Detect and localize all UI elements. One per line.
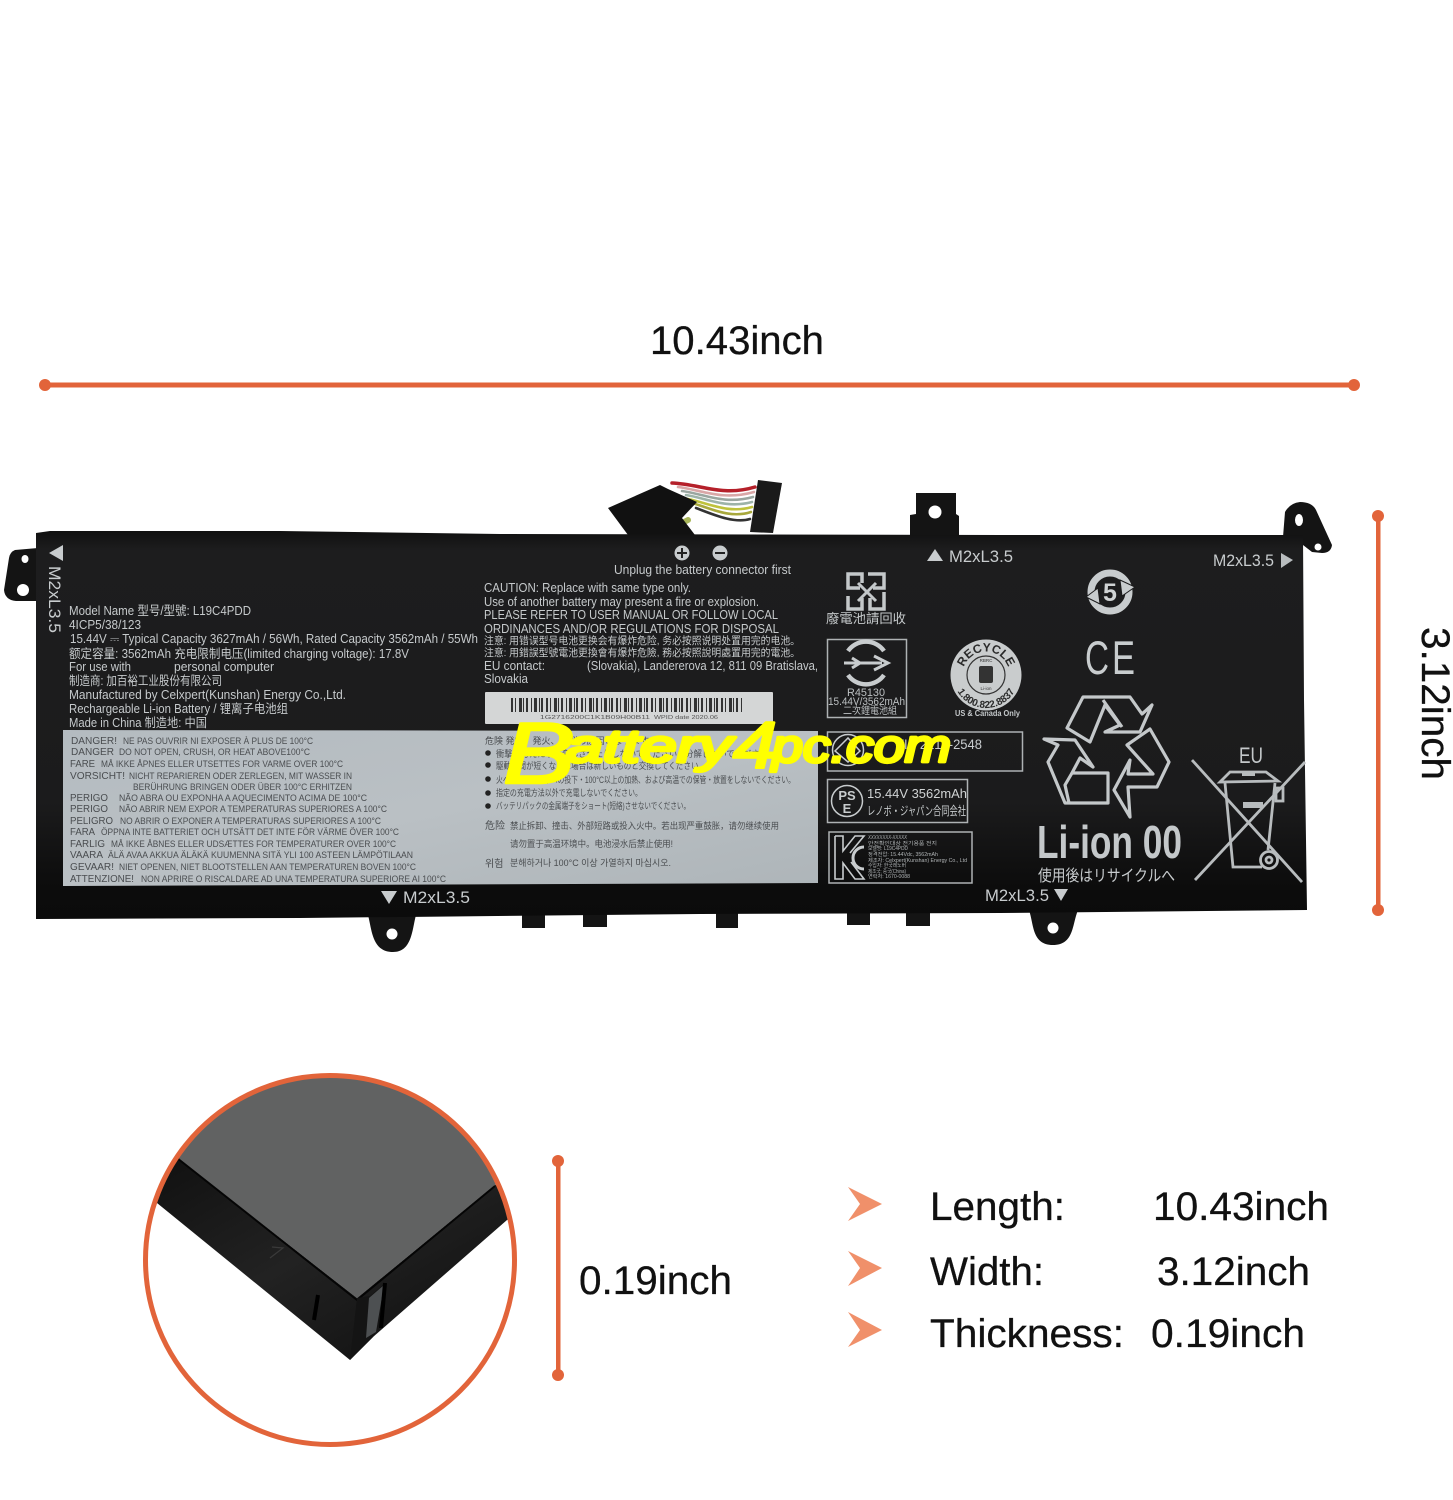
model information text block: Model Name 型号/型號: L19C4PDD [69,603,251,618]
asian language warnings text: 请勿置于高温环境中。电池浸水后禁止使用! [510,838,673,849]
multilingual warnings text: NICHT REPARIEREN ODER ZERLEGEN, MIT WASSER IN [129,771,352,781]
barcode label: 1G2716200C1K1B09H00B11 [540,715,650,721]
KC certification box: 정격전압: 15.44Vdc, 3562mAh [868,851,938,858]
Li-ion 00 marking [1037,816,1182,885]
PSE certification box: PS [838,788,856,803]
watermark: Battery4pc.com: B [503,706,575,802]
multilingual warnings text: NÃO ABRA OU EXPONHA A AQUECIMENTO ACIMA DE 100°C [119,793,367,803]
spec row: thickness [848,1312,1305,1356]
asian language warnings text: 駆動時間が短くなった場合は新しいものと交換してください。 [496,760,706,771]
barcode label: WPID date 2020.06 [654,715,718,721]
icon: CE mark [1085,631,1135,684]
screw marker bottom right: M2xL3.5 [985,886,1049,905]
Li-ion 00 marking: Li-ion 00 [1037,816,1182,868]
ear screw holes [17,506,1322,940]
multilingual warnings text: FARLIG [70,838,105,850]
battery corner photo [157,1078,508,1360]
multilingual warnings text: MÅ IKKE ÅBNES ELLER UDSÆTTES FOR TEMPERATURER OVER 100°C [111,839,396,849]
multilingual warnings text: NÃO ABRIR NEM EXPOR A TEMPERATURAS SUPERIORES A 100°C [119,804,387,814]
specification list [848,1185,1329,1356]
model information text block: personal computer [174,660,274,674]
asian language warnings text: 指定の充電方法以外で充電しないでください。 [496,787,642,798]
icon: RBRC recycle seal [950,640,1022,718]
icon: EFUP 5 year ring [1086,573,1135,611]
spec row: length: 10.43inch [1153,1185,1329,1229]
screw marker top: M2xL3.5 [949,547,1013,566]
PSE certification box: レノボ・ジャパン合同会社 [867,803,966,818]
width dimension: 3.12inch [1372,510,1453,916]
multilingual warnings text: ATTENZIONE! [70,873,134,885]
multilingual warnings text: DANGER! [71,735,117,747]
thickness dimension: 0.19inch [552,1155,732,1381]
model information text block: Rechargeable Li-ion Battery / 锂离子电池组 [69,701,288,716]
multilingual warnings text: NE PAS OUVRIR NI EXPOSER À PLUS DE 100°C [123,736,313,746]
caution text block: EU contact: [484,659,545,673]
asian language warnings text: 衝撃を与えたり、変形させたりしないでください。分解しないでください。 [496,748,776,759]
icon: recycling triangle [1044,697,1169,817]
multilingual warnings text: PERIGO [70,792,108,804]
asian language warnings text: 危険 発熱、発火、破裂の原因となります。 [485,735,657,746]
asian language warnings text: バッテリパックの金属端子をショート(短絡)させないでください。 [496,800,690,811]
asian language warnings text: 분해하거나 100°C 이상 가열하지 마십시오. [510,858,671,868]
thickness detail circle [143,1073,517,1447]
multilingual warnings text: PELIGRO [70,815,113,827]
TIS certification box: TIS 2217-2548 [896,737,982,752]
KC certification box: 모델명: L19C4PDD [868,845,908,852]
PSE certification box: E [843,801,852,816]
thickness arrow line [552,1155,564,1381]
icon: RBRC recycle seal: RBRC [980,658,993,663]
KC certification box: 제조국: 중국(China) [868,868,906,875]
watermark: Battery4pc.com [503,706,951,802]
KC certification box [829,832,972,883]
icon: BSMI certification box: 二次鋰電池組 [843,704,897,717]
model information text block: 4ICP5/38/123 [69,618,141,632]
multilingual warnings text: GEVAAR! [70,861,114,873]
PSE certification box: 15.44V 3562mAh [867,786,967,801]
asian language warnings text: 禁止拆卸、撞击、外部短路或投入火中。若出现严重鼓胀，请勿继续使用 [510,820,779,831]
spec row: thickness: 0.19inch [1151,1312,1305,1356]
watermark: Battery4pc.com: attery [566,720,736,772]
battery cable and connector [608,480,782,535]
screw marker right: M2xL3.5 [1213,551,1274,570]
icon: BSMI certification box [828,640,906,718]
icon: CE mark: E [1112,631,1135,684]
PSE certification box [828,780,968,822]
icon: EU crossed-out wheelie bin [1192,743,1305,882]
multilingual warnings text: FARE [70,758,95,770]
multilingual warnings text: DANGER [71,746,114,758]
asian language warnings text: 위험 [485,857,503,870]
spec row: width: Width: [930,1250,1044,1294]
KC certification box: 안전확인대상 전기용품 전지 [868,840,937,847]
multilingual warnings text: NON APRIRE O RISCALDARE AD UNA TEMPERATURA SUPERIORE AI 100°C [141,874,446,884]
caution text block: CAUTION: Replace with same type only. [484,581,691,595]
length label: 10.43inch [650,319,824,363]
polarity symbols and unplug notice [614,546,792,577]
spec row: length: Length: [930,1185,1065,1229]
polarity symbols and unplug notice: Unplug the battery connector first [614,563,792,577]
caution text block: ORDINANCES AND/OR REGULATIONS FOR DISPOSAL [484,622,779,636]
caution text block: 注意: 用错误型号电池更换会有爆炸危险, 务必按照说明处置用完的电池。 [484,634,800,647]
circle outline [146,1076,514,1444]
icon: RBRC recycle seal: 1.800.822.8837 [958,688,1014,708]
battery [4,480,1332,952]
grey warning panel [63,730,818,886]
TIS certification box [828,732,1022,771]
KC certification box: 수입자: 한국레노버 [868,862,906,869]
asian language warnings text: 危险 [485,819,505,832]
Li-ion 00 marking: 使用後はリサイクルへ [1038,867,1175,885]
width arrow line [1372,510,1384,916]
KC certification box: 제조자: Celxpert(Kunshan) Energy Co., Ltd [868,857,967,864]
multilingual warnings text: BERÜHRUNG BRINGEN ODER ÜBER 100°C ERHITZEN [133,782,352,792]
icon: Taiwan battery recycling mark: 廢電池請回收 [826,611,906,626]
caution text block: Use of another battery may present a fire or explosion. [484,595,759,609]
screw markers [45,545,1293,907]
KC certification box: 연락처: 1670-0088 [868,873,910,880]
multilingual warnings text: ÖPPNA INTE BATTERIET OCH UTSÄTT DET INTE FÖR VÄRME ÖVER 100°C [101,827,399,837]
multilingual warnings text [70,735,446,885]
model information text block: Manufactured by Celxpert(Kunshan) Energy Co.,Ltd. [69,688,346,702]
spec row: length [848,1185,1329,1229]
watermark: Battery4pc.com: pc.com [770,720,951,772]
asian language warnings text [485,735,795,870]
multilingual warnings text: NIET OPENEN, NIET BLOOTSTELLEN AAN TEMPERATUREN BOVEN 100°C [119,862,416,872]
battery mounting ears [4,493,1332,952]
multilingual warnings text: VAARA [70,849,103,861]
icon: RBRC recycle seal: RECYCLE [956,643,1016,667]
screw marker left: M2xL3.5 [45,566,64,633]
model information text block: Made in China 制造地: 中国 [69,715,207,730]
multilingual warnings text: MÅ IKKE ÅPNES ELLER UTSETTES FOR VARME OVER 100°C [101,759,343,769]
icon: RBRC recycle seal: Li-ion [980,686,992,691]
model information text block: 额定容量: 3562mAh 充电限制电压(limited charging voltage): 17.8V [69,646,410,661]
caution text block: 注意: 用錯誤型號電池更換會有爆炸危險, 務必按照說明處置用完的電池。 [484,646,800,659]
caution text block: Slovakia [484,672,528,686]
spec row: width [848,1250,1310,1294]
multilingual warnings text: ÄLÄ AVAA AKKUA ÄLÄKÄ KUUMENNA SITÄ YLI 100 ASTEEN LÄMPÖTILAAN [108,850,413,860]
watermark: Battery4pc.com: 4 [733,708,777,782]
screw marker bottom left: M2xL3.5 [403,888,470,907]
model information text block: 15.44V ⎓ Typical Capacity 3627mAh / 56Wh, Rated Capacity 3562mAh / 55Wh [70,632,478,646]
barcode label [485,692,773,724]
length dimension: 10.43inch [39,319,1360,391]
battery body [36,531,1307,919]
multilingual warnings text: PERIGO [70,803,108,815]
icon: RBRC recycle seal: US & Canada Only [955,709,1020,718]
multilingual warnings text: VORSICHT! [70,770,125,782]
multilingual warnings text: NO ABRIR O EXPONER A TEMPERATURAS SUPERIORES A 100°C [120,816,381,826]
caution text block: (Slovakia), Landererova 12, 811 09 Bratislava, [587,659,818,673]
icon: EFUP 5 year ring: 5 [1103,579,1117,607]
spec row: width: 3.12inch [1157,1250,1310,1294]
model information text block: For use with [69,660,131,674]
KC certification box: XXXXXXXX-XXXXX [867,835,908,841]
model information text block: 制造商: 加百裕工业股份有限公司 [69,673,222,688]
icon: BSMI certification box: R45130 [847,687,885,699]
multilingual warnings text: FARA [70,826,95,838]
icon: BSMI certification box: 15.44V/3562mAh [828,696,905,708]
icon: CE mark: C [1085,631,1109,684]
icon: Taiwan battery recycling mark [826,574,906,626]
icon: EU crossed-out wheelie bin: EU [1239,743,1263,768]
caution text block [484,581,818,686]
caution text block: PLEASE REFER TO USER MANUAL OR FOLLOW LOCAL [484,608,778,622]
length arrow line [39,379,1360,391]
spec row: thickness: Thickness: [930,1312,1124,1356]
multilingual warnings text: DO NOT OPEN, CRUSH, OR HEAT ABOVE100°C [119,747,310,757]
asian language warnings text: 火への投下、火中への投下・100°C以上の加熱、および高温での保管・放置をしないでください。 [496,774,795,785]
thickness label: 0.19inch [579,1259,732,1303]
model information text block [69,603,478,730]
